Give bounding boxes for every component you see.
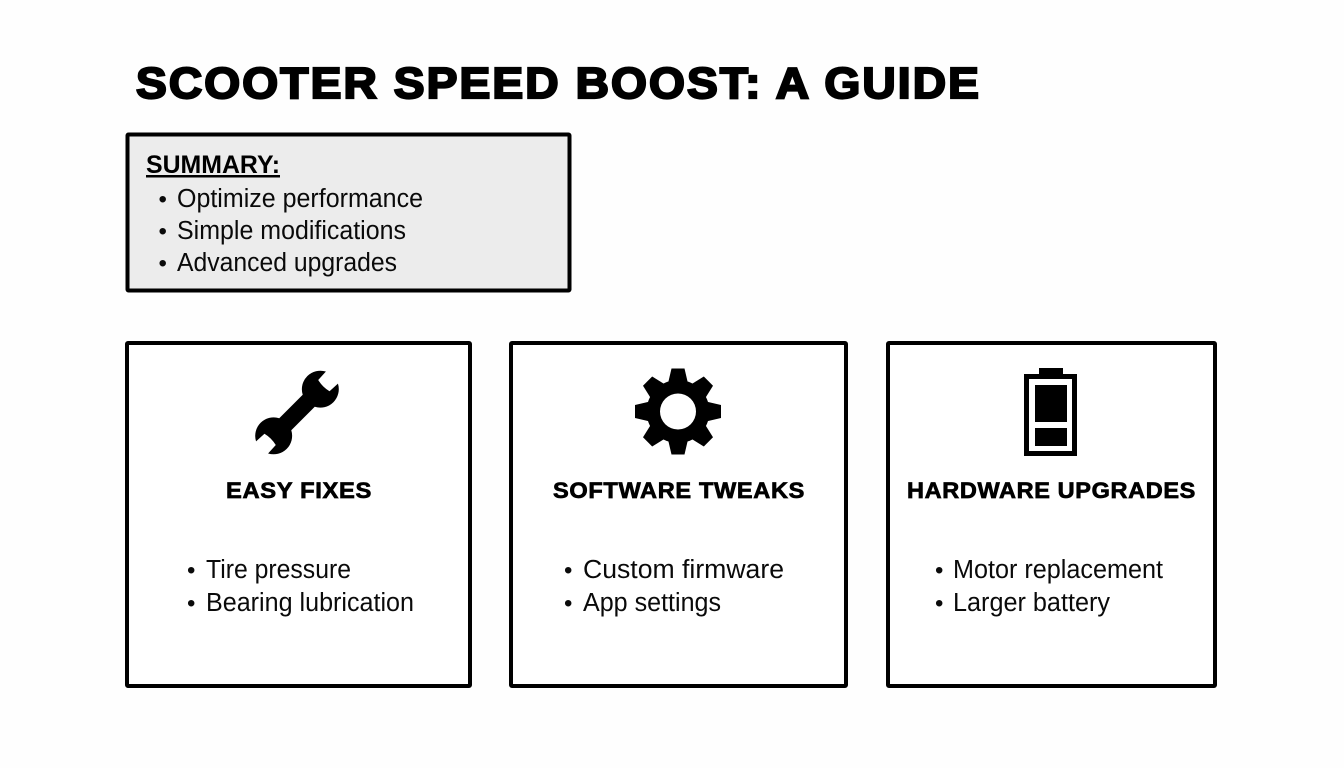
summary list: Simple modifications: [177, 217, 406, 245]
easy fixes card: [127, 343, 470, 686]
software tweaks list: [564, 556, 784, 617]
heading: hardware upgrades: HARDWARE UPGRADES: [907, 478, 1196, 503]
software tweaks list: Custom firmware: [583, 556, 784, 584]
easy fixes list: •: [187, 557, 195, 584]
hardware upgrades list: [935, 556, 1163, 617]
panel: easy fixes: [127, 343, 470, 686]
easy fixes list: Bearing lubrication: [206, 589, 414, 617]
easy fixes list: [187, 556, 414, 617]
summary list: •: [158, 250, 167, 277]
summary box: [128, 134, 570, 290]
heading: software tweaks: SOFTWARE TWEAKS: [553, 478, 805, 503]
panel: hardware upgrades: [888, 343, 1215, 686]
icon: wrench: [249, 365, 345, 460]
hardware upgrades card: [888, 343, 1215, 686]
hardware upgrades list: •: [935, 557, 943, 584]
summary list: •: [158, 186, 167, 213]
easy fixes list: •: [187, 590, 195, 617]
panel: summary: [128, 134, 570, 290]
software tweaks card: [511, 343, 846, 686]
hardware upgrades list: Motor replacement: [953, 556, 1163, 584]
hardware upgrades list: Larger battery: [953, 589, 1110, 617]
hardware upgrades list: •: [935, 590, 943, 617]
summary list: Optimize performance: [177, 185, 423, 213]
summary list: Advanced upgrades: [177, 249, 397, 277]
icon: gear: [635, 368, 721, 454]
panel: software tweaks: [511, 343, 846, 686]
heading: easy fixes: EASY FIXES: [226, 478, 372, 503]
software tweaks list: App settings: [583, 589, 721, 617]
software tweaks list: •: [564, 590, 572, 617]
title: SCOOTER SPEED BOOST: A GUIDE: [136, 59, 981, 108]
easy fixes list: Tire pressure: [206, 556, 351, 584]
icon: battery: [1026, 368, 1074, 454]
summary list: [158, 185, 423, 277]
summary heading: SUMMARY:: [146, 151, 280, 179]
software tweaks list: •: [564, 557, 572, 584]
summary list: •: [158, 218, 167, 245]
